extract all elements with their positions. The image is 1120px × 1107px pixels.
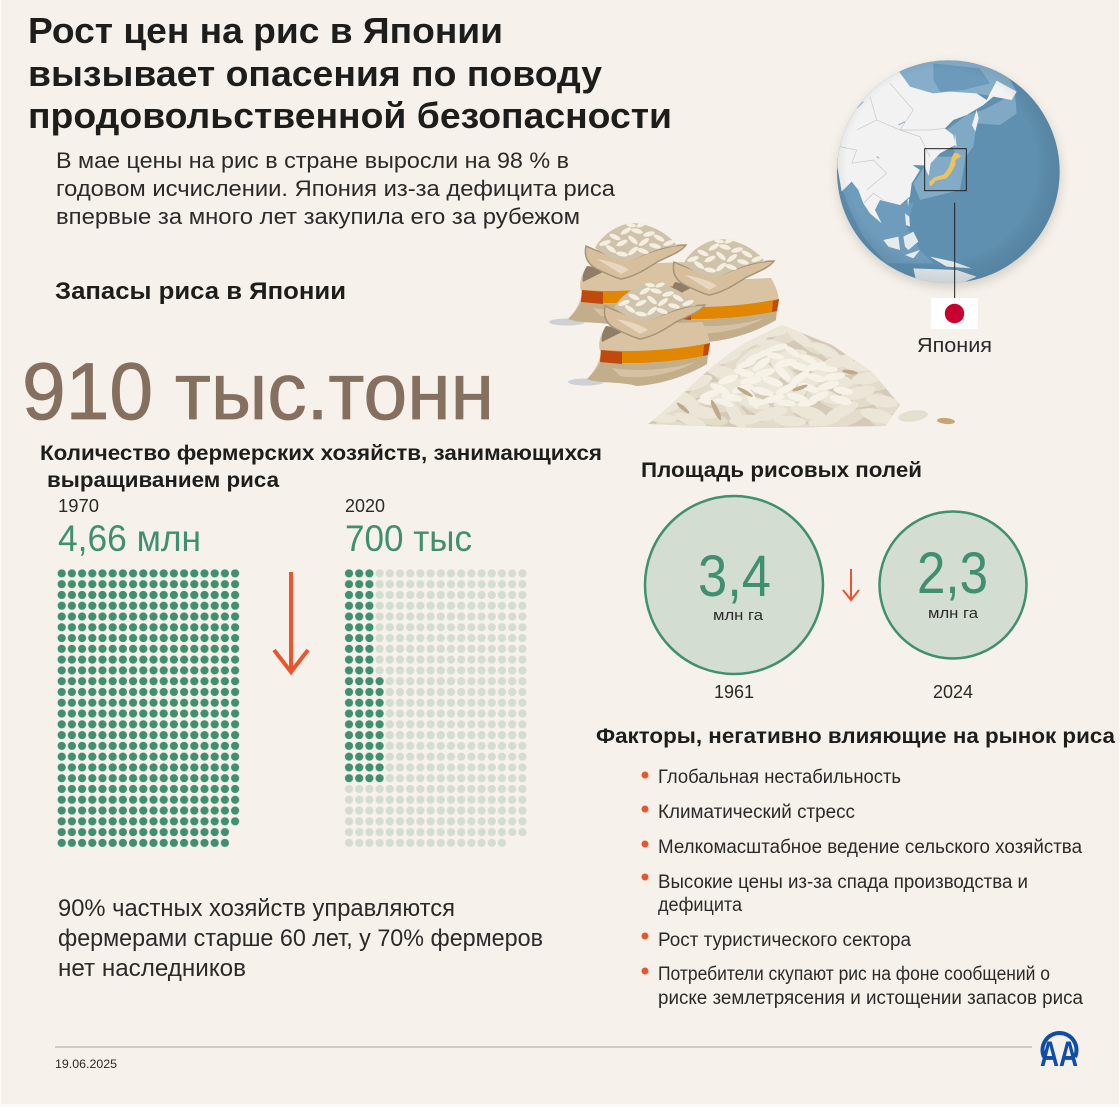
label: Japan: Япония: [917, 335, 992, 357]
heading: number of rice farms: Количество фермерских хозяйств, занимающихся: [40, 442, 602, 465]
Asia land: [837, 72, 1017, 224]
locator box: [925, 149, 966, 191]
subtitle text: В мае цены на рис в стране выросли на 98 % в: [56, 148, 569, 173]
heading: negative factors: Факторы, негативно влияющие на рынок риса: [596, 725, 1115, 748]
circle: area in 2024: млн га: [928, 605, 979, 622]
islands: [883, 198, 977, 287]
arrow: decline in farms: [274, 572, 308, 672]
list: negative factors: [642, 767, 1083, 1009]
icon: globe with Japan: [830, 57, 1061, 298]
circle: area in 2024: [880, 512, 1026, 702]
paragraph: aging farmers: фермерами старше 60 лет, у 70% фермеров: [58, 925, 543, 952]
circle: area in 1961: 1961: [714, 682, 754, 702]
list: negative factors: Высокие цены из-за спада производства и: [658, 872, 1028, 893]
subtitle text: впервые за много лет закупила его за рубежом: [56, 204, 580, 229]
title: продовольственной безопасности: [28, 95, 672, 136]
circle: area in 2024: 2024: [933, 682, 973, 702]
list: negative factors: Мелкомасштабное ведение сельского хозяйства: [658, 837, 1082, 858]
list: negative factors: риске землетрясения и истощении запасов риса: [658, 988, 1083, 1009]
dot chart: 1970 farms: [57, 568, 240, 848]
subtitle text: годовом исчислении. Япония из-за дефицита риса: [56, 176, 616, 201]
date: 19.06.2025: [55, 1057, 117, 1071]
stat: 910 thousand tonnes: 910 тыс.тонн: [22, 347, 494, 437]
circle: area in 1961: млн га: [713, 607, 764, 624]
stat: farms in 1970: [58, 496, 201, 559]
borders: [840, 83, 945, 203]
heading: number of rice farms: выращиванием риса: [47, 469, 279, 492]
paragraph: aging farmers: 90% частных хозяйств управляются: [58, 895, 455, 922]
circle: area in 2024: 2,3: [917, 541, 988, 606]
stat: farms in 1970: 1970: [58, 496, 99, 516]
circle: area in 1961: 3,4: [698, 544, 771, 609]
heading: number of rice farms: [40, 442, 602, 492]
stat: farms in 1970: 4,66 млн: [58, 518, 201, 559]
heading: rice stocks: Запасы риса в Японии: [55, 278, 346, 305]
dot chart: 2020 farms: [344, 568, 528, 848]
paragraph: aging farmers: [58, 895, 543, 982]
arrow: area decline: [843, 569, 859, 600]
list: negative factors: Глобальная нестабильность: [658, 767, 901, 788]
circle: area in 1961: [645, 496, 823, 702]
illustration: rice bags and pile: [549, 221, 955, 440]
stat: farms in 2020: 2020: [345, 496, 385, 516]
paragraph: aging farmers: нет наследников: [58, 955, 246, 982]
heading: rice field area: Площадь рисовых полей: [641, 458, 922, 482]
leader line: [953, 203, 956, 298]
arctic shelf: [899, 60, 1016, 96]
list: negative factors: дефицита: [658, 895, 742, 916]
stat: farms in 2020: 700 тыс: [345, 518, 472, 559]
list: negative factors: Рост туристического сектора: [658, 930, 911, 951]
title: Рост цен на рис в Японии: [28, 10, 503, 51]
Japan: [930, 153, 960, 185]
title: вызывает опасения по поводу: [28, 53, 602, 94]
logo: Anadolu Agency: AA: [1040, 1035, 1078, 1074]
subtitle text: [56, 148, 616, 229]
icon: flag of Japan: [931, 298, 978, 329]
stat: farms in 2020: [345, 496, 472, 559]
list: negative factors: Климатический стресс: [658, 802, 855, 823]
rice pile: [648, 325, 955, 428]
list: negative factors: Потребители скупают рис на фоне сообщений о: [658, 964, 1050, 985]
title: [28, 10, 672, 136]
